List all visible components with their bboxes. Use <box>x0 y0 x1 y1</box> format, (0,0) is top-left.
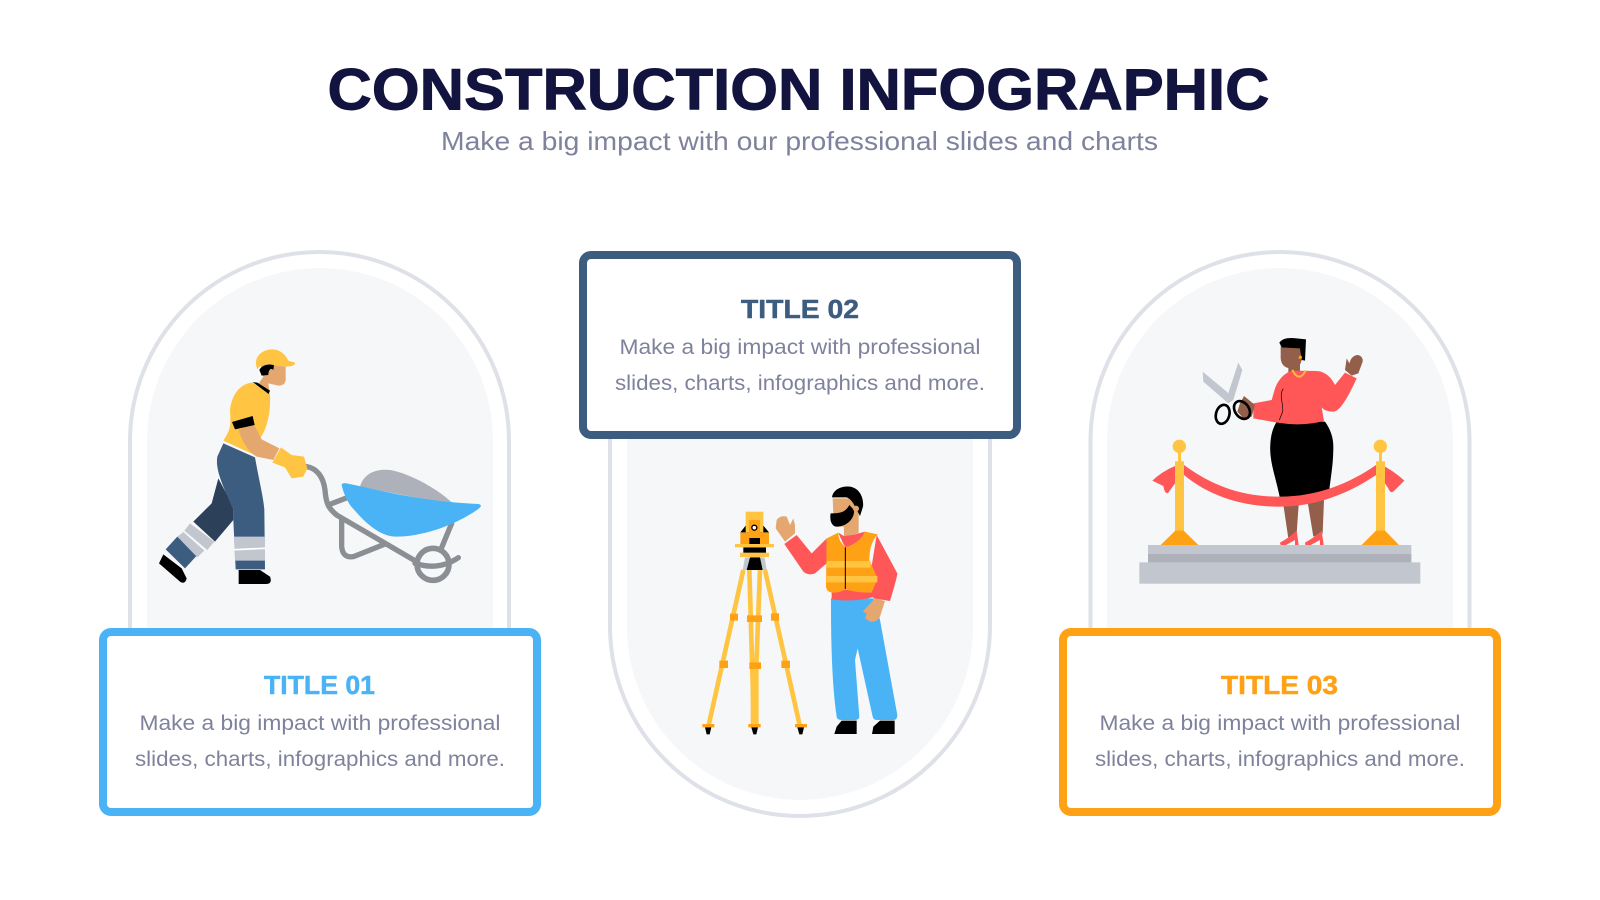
card: title 01: TITLE 01 <box>264 670 375 700</box>
arch: left <box>130 252 509 628</box>
card: title 01: slides, charts, infographics and more. <box>135 748 505 771</box>
title: CONSTRUCTION INFOGRAPHIC <box>328 58 1270 122</box>
card: title 03 <box>1063 632 1497 812</box>
arch: right <box>1090 252 1470 628</box>
panel: title 03 <box>1063 252 1497 812</box>
card: title 03: TITLE 03 <box>1221 670 1338 700</box>
card: title 03: slides, charts, infographics and more. <box>1095 748 1465 771</box>
card: title 02: TITLE 02 <box>741 294 859 324</box>
illustration: woman cutting ribbon <box>1139 338 1420 584</box>
card: title 01: Make a big impact with professional <box>140 712 500 735</box>
subtitle: Make a big impact with our professional slides and charts <box>441 126 1158 156</box>
card: title 01 <box>103 632 537 812</box>
illustration: worker with wheelbarrow <box>159 349 481 584</box>
card: title 02: Make a big impact with professional <box>620 336 980 359</box>
card: title 02: slides, charts, infographics and more. <box>615 372 985 395</box>
panel: title 02 <box>583 255 1017 816</box>
panel: title 01 <box>103 252 537 812</box>
card: title 03: Make a big impact with professional <box>1100 712 1460 735</box>
illustration: surveyor with tripod <box>702 487 897 734</box>
arch: center <box>610 430 990 816</box>
card: title 02 <box>583 255 1017 435</box>
